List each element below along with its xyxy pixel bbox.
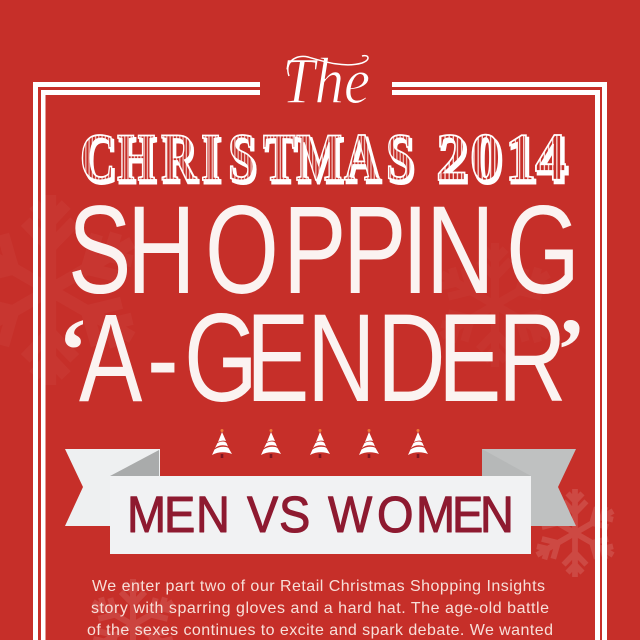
ribbon front panel (110, 476, 531, 554)
title: Christmas 2014: CHRISTMAS (80, 119, 413, 195)
double line frame (33, 82, 607, 640)
title: A-Gender: ’ (556, 301, 586, 400)
title: A-Gender: A-GENDER (79, 288, 567, 428)
snowflake: centre right (433, 243, 557, 367)
snowflake: banner right (531, 489, 619, 577)
intro paragraph: We enter part two of our Retail Christmas Shopping Insights (92, 578, 545, 595)
title: Christmas 2014: 2014 (438, 124, 569, 199)
title: Christmas 2014: CHRISTMAS (82, 122, 415, 198)
intro paragraph: story with sparring gloves and a hard hat. The age-old battle (91, 600, 549, 617)
intro paragraph (87, 578, 553, 639)
banner text: MEN VS WOMEN (127, 487, 514, 543)
title: Christmas 2014 (80, 119, 569, 199)
row of Christmas trees (212, 429, 428, 458)
snowflake: behind text (87, 579, 179, 640)
title: Shopping: SHOPPING (68, 180, 580, 320)
intro paragraph: of the sexes continues to excite and spark debate. We wanted (87, 622, 553, 639)
ribbon right fold (482, 449, 531, 476)
title: Christmas 2014: 2014 (436, 121, 566, 196)
ribbon right tail (482, 449, 576, 526)
snowflake: large left (0, 195, 145, 385)
title: A-Gender: ‘ (58, 301, 88, 400)
ribbon left tail (65, 449, 160, 526)
ribbon left fold (110, 450, 159, 476)
title: The: The (282, 45, 370, 118)
banner ribbon (65, 449, 576, 554)
